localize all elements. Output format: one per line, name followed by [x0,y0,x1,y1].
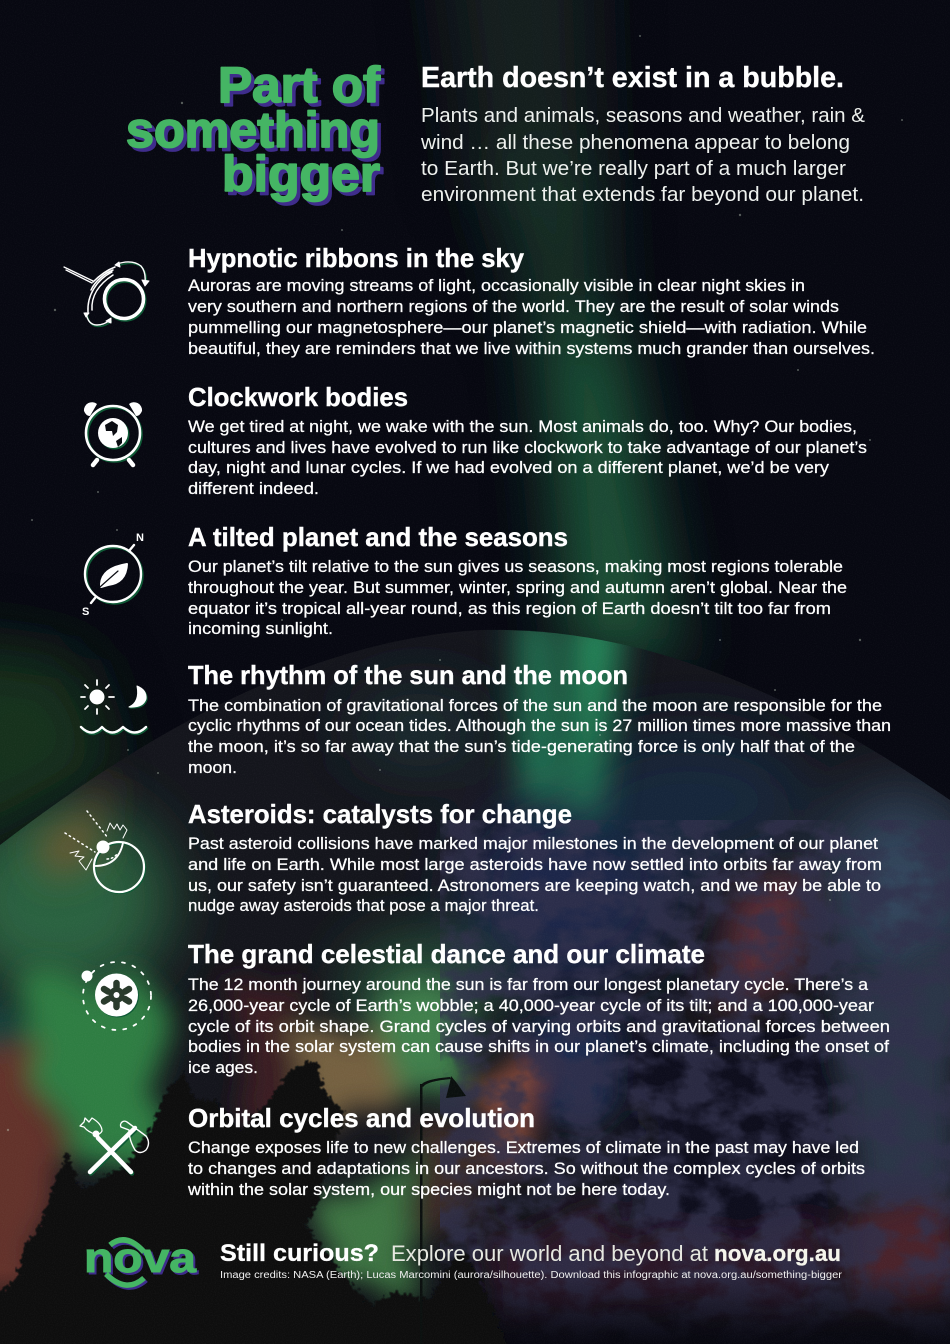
heading: Asteroids: catalysts for change [188,799,572,829]
body text: cycle of its orbit shape. Grand cycles of varying orbits and gravitational forces between [188,1018,890,1036]
icon: asteroid impact [65,811,145,893]
logo: nova: nova [86,1236,199,1283]
body text: moon. [188,759,237,777]
heading: A tilted planet and the seasons [188,522,568,552]
heading: Orbital cycles and evolution [188,1103,535,1133]
bottom fade to black [0,1270,950,1344]
heading: The grand celestial dance and our climate [188,939,705,969]
body text [188,976,890,1077]
section: Asteroids: catalysts for change [65,799,882,915]
body text: bodies in the solar system can cause shifts in our planet’s climate, including the onset of [188,1038,889,1056]
body text: different indeed. [188,480,319,498]
body text: us, our safety isn’t guaranteed. Astronomers are keeping watch, and we may be able to [188,877,881,895]
intro paragraph: environment that extends far beyond our planet. [421,183,864,206]
icon: sun, moon and waves [81,680,147,734]
footer call to action: Explore our world and beyond at [391,1241,708,1266]
body text: incoming sunlight. [188,620,333,638]
title: Part of something bigger: something [126,102,380,158]
body text: We get tired at night, we wake with the sun. Most animals do, too. Why? Our bodies, [188,418,857,436]
mottled cloud cover on the earth [440,820,950,1344]
body text [188,418,867,498]
heading: Clockwork bodies [188,382,408,412]
section: The rhythm of the sun and the moon [81,660,891,777]
image credits: Image credits: NASA (Earth); Lucas Marcomini (aurora/silhouette). Download this infographic at nova.org.au/something-bigger [220,1270,843,1281]
title: Part of something bigger [126,57,384,206]
street lamp [420,1076,466,1344]
body text: The 12 month journey around the sun is far from our longest planetary cycle. There’s a [188,976,869,994]
body text: within the solar system, our species might not be here today. [187,1181,670,1199]
body text [188,277,875,358]
body text: beautiful, they are reminders that we live within systems much grander than ourselves. [188,340,875,358]
body text: pummelling our magnetosphere—our planet’s magnetic shield—with radiation. While [188,319,867,337]
body text: Change exposes life to new challenges. Extremes of climate in the past may have led [188,1139,859,1157]
intro paragraph: Plants and animals, seasons and weather, rain & [421,104,865,127]
intro paragraph: wind … all these phenomena appear to belong [420,131,850,154]
title: Part of something bigger: Part of [218,57,380,113]
footer call to action: nova.org.au [714,1241,841,1266]
icon: aurora ring [64,262,149,326]
body text: the moon, it’s so far away that the sun’s tide-generating force is only half that of the [188,738,855,756]
title: Part of something bigger: bigger [226,150,384,206]
earth disc [0,630,950,1292]
icon: tilted compass with leaf: N [136,532,144,544]
icon: tilted compass with leaf: S [82,606,89,618]
heading: Hypnotic ribbons in the sky [188,243,525,273]
body text: 26,000-year cycle of Earth’s wobble; a 40,000-year cycle of its tilt; and a 100,000-year [188,997,875,1015]
body text [188,697,891,777]
section: Hypnotic ribbons in the sky [64,243,875,358]
body text: cyclic rhythms of our ocean tides. Although the sun is 27 million times more massive than [188,717,891,735]
body text: Auroras are moving streams of light, occasionally visible in clear night skies in [188,277,805,295]
aurora band upper sky [0,0,680,870]
section: Clockwork bodies [84,382,867,498]
footer call to action: Still curious? [220,1240,379,1267]
body text [188,835,882,915]
footer call to action [220,1240,843,1281]
title: Part of something bigger: something [130,106,384,162]
intro paragraph: to Earth. But we’re really part of a much larger [421,157,846,180]
body text [187,1139,865,1199]
icon: orbit with flower [82,962,151,1030]
body text: Past asteroid collisions have marked major milestones in the development of our planet [188,835,878,853]
body text: very southern and northern regions of the world. They are the result of solar winds [188,298,839,316]
title: Part of something bigger: bigger [222,146,380,202]
body text: The combination of gravitational forces of the sun and the moon are responsible for the [188,697,882,715]
section: Orbital cycles and evolution [80,1103,865,1199]
body text: to changes and adaptations in our ancestors. So without the complex cycles of orbits [188,1160,865,1178]
body text [188,558,847,638]
body text: ice ages. [188,1059,258,1077]
body text: and life on Earth. While most large asteroids have now settled into orbits far away from [188,856,882,874]
title: Part of something bigger: Part of [222,60,384,116]
intro text block [420,62,865,206]
icon: tilted compass with leaf [82,532,144,618]
section: A tilted planet and the seasons [82,522,847,638]
intro heading: Earth doesn’t exist in a bubble. [421,62,844,94]
icon: crossed torch and axe [80,1118,148,1174]
body text: nudge away asteroids that pose a major threat. [188,897,539,915]
stars [7,35,903,1131]
section: The grand celestial dance and our climate [82,939,890,1077]
intro paragraph [420,104,865,206]
body text: equator it’s tropical all-year round, as this region of Earth doesn’t tilt too far from [188,600,831,618]
icon: alarm clock with globe [84,402,142,465]
heading: The rhythm of the sun and the moon [188,660,628,690]
lower aurora and continents [0,950,950,1340]
body text: throughout the year. But summer, winter, spring and autumn aren’t global. Near the [188,579,847,597]
body text: Our planet’s tilt relative to the sun gives us seasons, making most regions tolerable [188,558,843,576]
body text: day, night and lunar cycles. If we had evolved on a different planet, we’d be very [188,459,830,477]
body text: cultures and lives have evolved to run like clockwork to take advantage of our planet’s [188,439,867,457]
logo: nova: nova [84,1234,197,1281]
forest silhouette [0,1060,510,1344]
